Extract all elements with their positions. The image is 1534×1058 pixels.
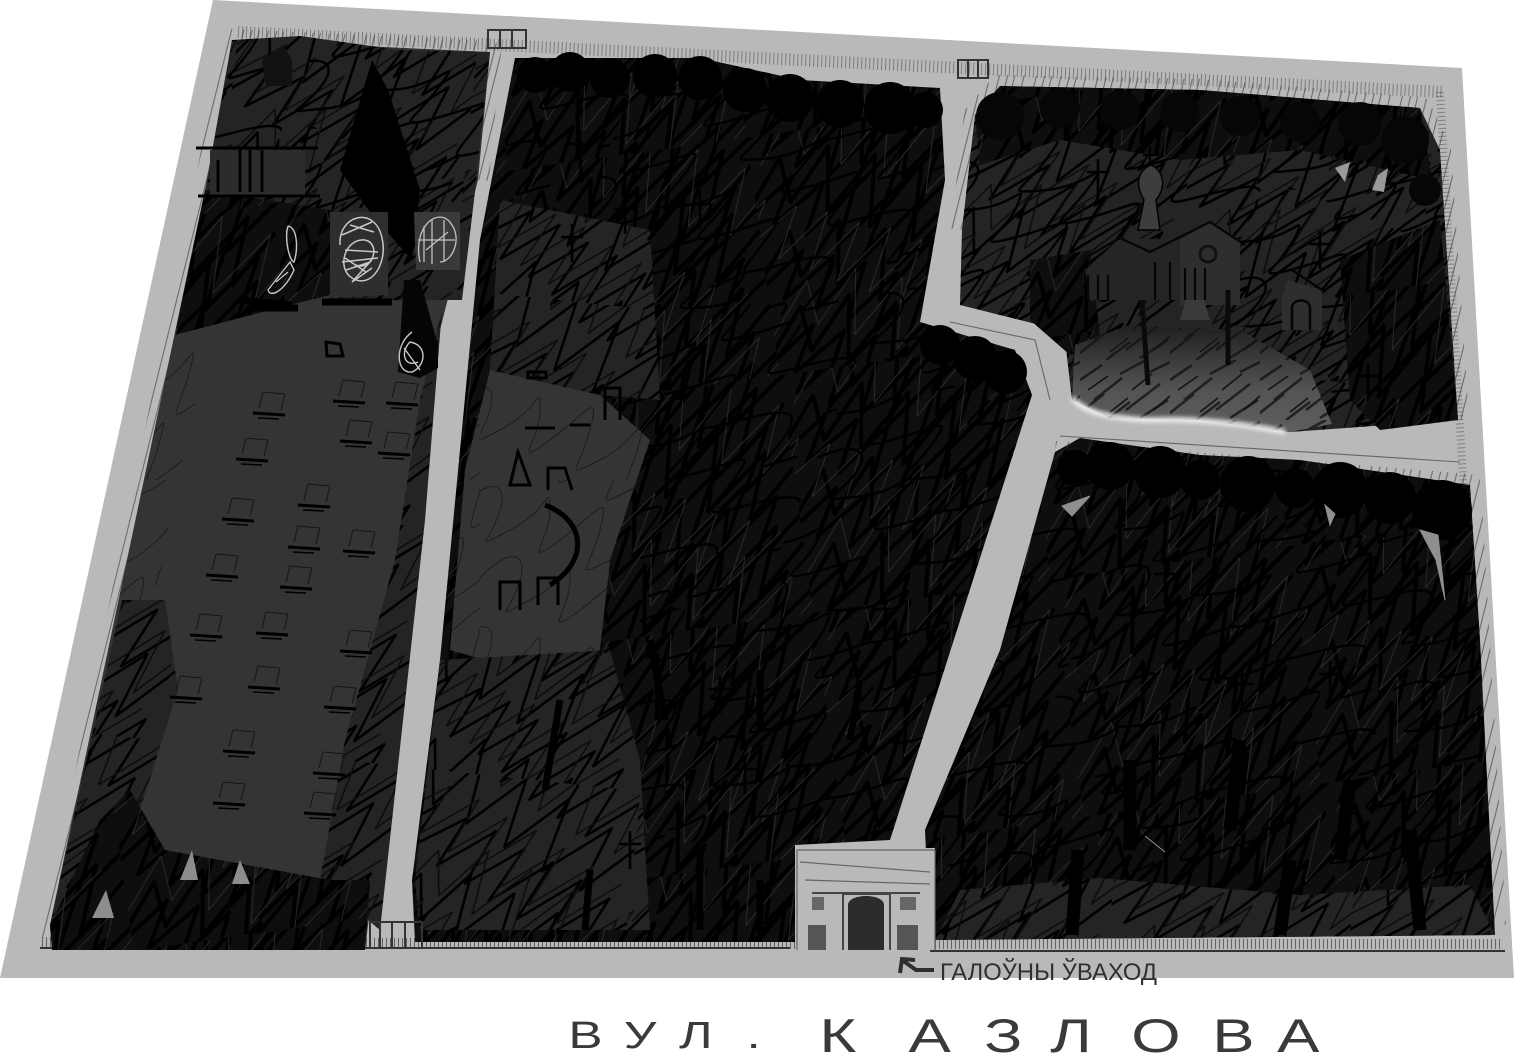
- panel: lower-right block with woods: [925, 438, 1495, 940]
- tree crowns along the top: [1057, 442, 1472, 540]
- overlay scribble: [960, 86, 1458, 430]
- street label: [568, 1009, 1320, 1058]
- crosses: [561, 131, 896, 869]
- graves: [170, 380, 418, 819]
- block fill: [412, 58, 1032, 942]
- overlay scribble top: [205, 36, 490, 210]
- house: [196, 45, 320, 196]
- left margin scrub: [50, 335, 205, 925]
- upper-left lighter wood: [490, 200, 660, 400]
- tree crowns on top: [517, 52, 1027, 394]
- left side dark trees: [1030, 250, 1100, 355]
- street label: ВУЛ.: [568, 1013, 761, 1056]
- bottom scrub: [50, 790, 370, 950]
- lower-left lighter wood: [415, 650, 650, 930]
- overlay scribble: [500, 58, 1032, 842]
- meadow glow: [1072, 398, 1285, 432]
- arrow to main entrance: [900, 959, 934, 973]
- tomb markers: [500, 372, 620, 610]
- block base: [50, 40, 490, 950]
- church: [1085, 146, 1325, 330]
- side scrub upper left: [175, 190, 330, 335]
- road sketch lines: [950, 322, 1460, 462]
- side gate: [370, 922, 422, 948]
- panel: left block with open graves: [50, 36, 490, 950]
- panel: upper-right block with church: [960, 86, 1458, 432]
- tree trunks: [545, 360, 860, 935]
- block fill: [960, 86, 1458, 432]
- ghostly monument right: [418, 217, 456, 264]
- right side dark trees: [1340, 220, 1458, 430]
- light shards: [1335, 162, 1388, 192]
- panel: centre block with crosses: [412, 52, 1032, 942]
- black plinths: [240, 300, 392, 308]
- crescent monument: [545, 505, 578, 585]
- dark tree cap: [975, 86, 1432, 180]
- tree trunks: [1072, 740, 1420, 935]
- ghostly monument centre: [340, 217, 383, 282]
- monument niche 2: [414, 212, 460, 270]
- ghostly statue left: [268, 226, 296, 293]
- crosses: [1154, 561, 1341, 709]
- meadow shading: [1072, 325, 1332, 432]
- monument niche 1: [330, 212, 388, 298]
- right margin scrub: [320, 310, 442, 930]
- main gate building: [797, 848, 935, 950]
- meadow trees: [1142, 290, 1228, 385]
- entrance label: ГАЛОЎНЫ ЎВАХОД: [940, 958, 1157, 986]
- overlay scribble: [925, 452, 1485, 885]
- block fill: [925, 438, 1495, 940]
- pale shards: [1062, 496, 1445, 852]
- pale shards in the scrub: [92, 850, 250, 918]
- meadow: [1072, 325, 1332, 432]
- top gate: [488, 30, 526, 48]
- ghostly figure lower: [399, 332, 423, 372]
- top right gate: [958, 60, 988, 78]
- lower strip: [935, 878, 1495, 940]
- black pedestal: [398, 280, 438, 378]
- lower left dark wood: [50, 600, 178, 925]
- small headstones near path: [326, 342, 343, 356]
- thick woods top: [205, 36, 490, 300]
- crowns: [976, 88, 1441, 206]
- clearing: [450, 370, 650, 670]
- crosses: [1087, 159, 1379, 401]
- dark tree tower: [340, 60, 420, 260]
